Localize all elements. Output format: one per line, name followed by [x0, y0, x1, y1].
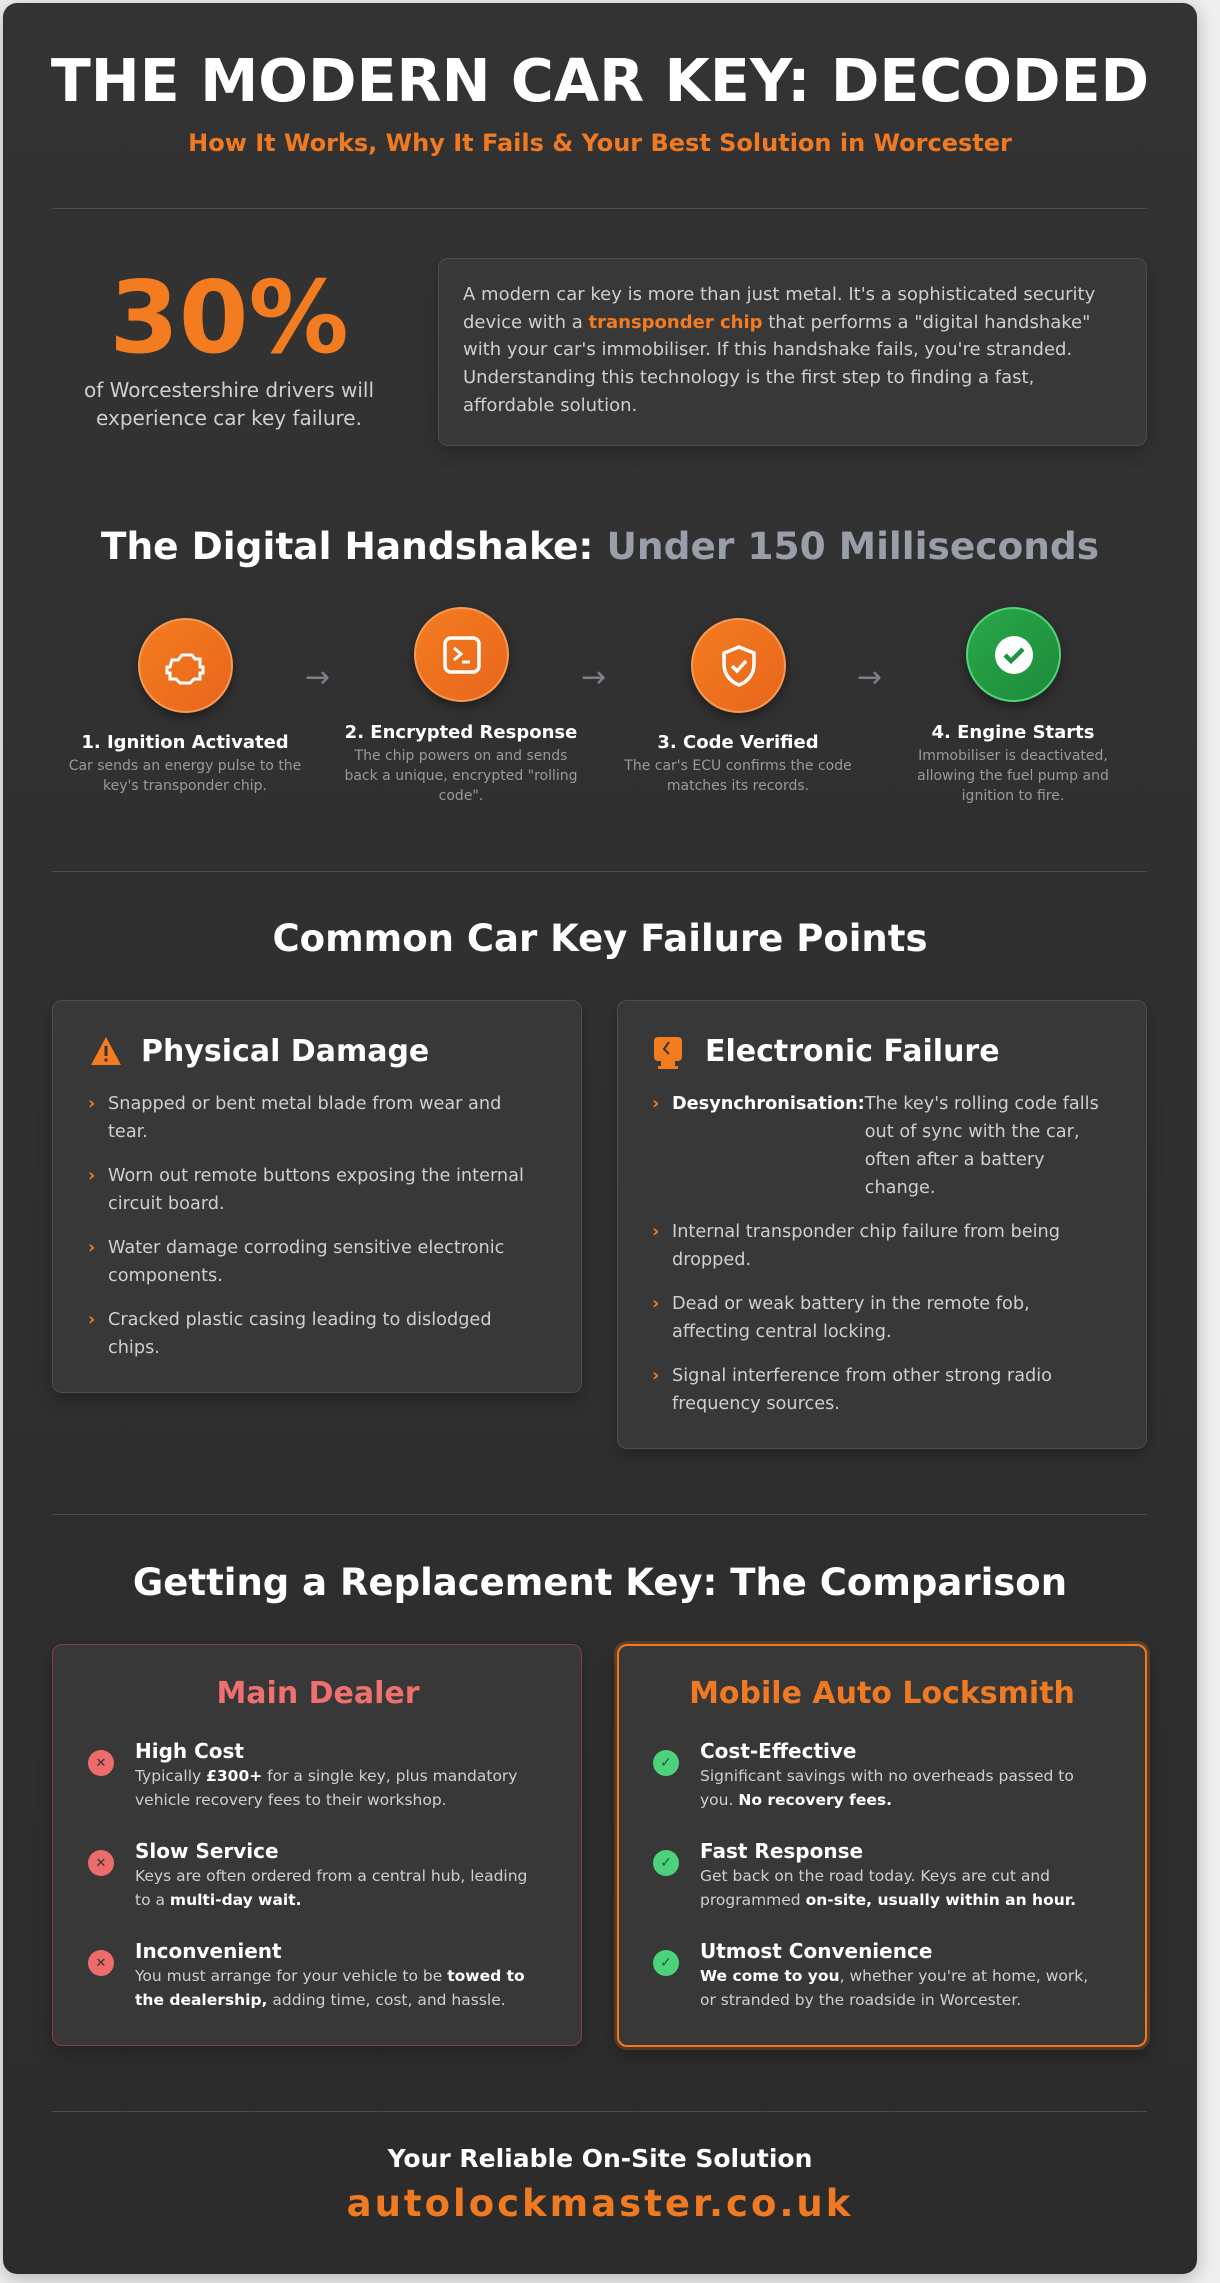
step 4 text: 4. Engine Starts [932, 722, 1094, 743]
panel: physical damage [52, 1000, 582, 1393]
heading: comparison: Getting a Replacement Key: The Comparison [133, 1561, 1067, 1604]
panel: mobile locksmith: Significant savings with no overheads passed to you. No recovery fees. [700, 1767, 1074, 1809]
item: fast response [653, 1839, 1076, 1909]
panel: mobile locksmith: Get back on the road today. Keys are cut and programmed on-site, usually within an hour. [700, 1867, 1076, 1909]
panel: physical damage: Water damage corroding sensitive electronic components. [108, 1238, 504, 1286]
step 2 icon: terminal [414, 607, 509, 702]
intro text box: A modern car key is more than just metal. It's a sophisticated security device with a transponder chip that performs a "digital handshake" with your car's immobiliser. If this handshake fails, you're stranded. Understanding this technology is the first step to finding a fast, affordable solution. [463, 284, 1095, 416]
step 3 icon: shield [691, 618, 786, 713]
list [652, 1094, 1099, 1198]
panel: electronic failure: Signal interference from other strong radio frequency sources. [672, 1366, 1052, 1414]
panel: mobile locksmith: Cost-Effective [700, 1739, 856, 1763]
panel: main dealer: Keys are often ordered from a central hub, leading to a multi-day wait. [135, 1867, 527, 1909]
panel: electronic failure: › [652, 1366, 659, 1386]
step 2 text [344, 722, 578, 804]
step 3 text: The car's ECU confirms the code matches its records. [624, 758, 852, 794]
card title: Main Dealer [216, 1676, 420, 1711]
panel: electronic failure: › [652, 1094, 659, 1114]
panel: main dealer: You must arrange for your vehicle to be towed to the dealership, adding time, cost, and hassle. [135, 1967, 525, 2009]
intro text box [438, 258, 1147, 446]
panel: main dealer: ✕ [96, 1956, 106, 1970]
footer url: autolockmaster.co.uk [347, 2182, 853, 2225]
step 3 text: 3. Code Verified [657, 732, 819, 753]
item: convenience [653, 1939, 1088, 2009]
icon: warning [91, 1037, 121, 1065]
arrow 1: → [305, 660, 330, 695]
panel: mobile locksmith [617, 1644, 1147, 2047]
panel: main dealer: Inconvenient [135, 1939, 282, 1963]
item: high cost [88, 1739, 517, 1809]
item: cost-effective [653, 1739, 1074, 1809]
item: slow service [88, 1839, 527, 1909]
step 4 icon: check [966, 607, 1061, 702]
title: THE MODERN CAR KEY: DECODED [51, 47, 1149, 115]
step 4 text [917, 722, 1109, 804]
list: Snapped or bent metal blade from wear and tear. [108, 1094, 501, 1142]
panel: physical damage: Worn out remote buttons exposing the internal circuit board. [108, 1166, 524, 1214]
panel: main dealer: ✕ [96, 1756, 106, 1770]
panel: mobile locksmith: ✓ [660, 1755, 672, 1771]
step 1 icon: engine [138, 618, 233, 713]
list: Desynchronisation: [672, 1094, 865, 1114]
step 3 text [624, 732, 852, 794]
step 4 text: Immobiliser is deactivated, allowing the fuel pump and ignition to fire. [917, 748, 1109, 804]
step 1 text: 1. Ignition Activated [81, 732, 289, 753]
step 2 text: The chip powers on and sends back a unique, encrypted "rolling code". [344, 748, 578, 804]
panel: mobile locksmith: ✓ [660, 1955, 672, 1971]
panel: electronic failure: Dead or weak battery in the remote fob, affecting central locking. [672, 1294, 1030, 1342]
stat: 30%: 30% [109, 259, 349, 376]
icon: electronic [654, 1037, 682, 1069]
panel: electronic failure: › [652, 1294, 659, 1314]
subtitle: How It Works, Why It Fails & Your Best Solution in Worcester [188, 129, 1012, 157]
panel: mobile locksmith: Fast Response [700, 1839, 863, 1863]
panel: mobile locksmith: Utmost Convenience [700, 1939, 932, 1963]
panel: physical damage: › [88, 1166, 95, 1186]
stat: 30% [84, 259, 374, 430]
card title: Mobile Auto Locksmith [689, 1676, 1075, 1711]
panel: main dealer [52, 1644, 582, 2046]
stat: 30%: of Worcestershire drivers will [84, 378, 374, 402]
panel: electronic failure [617, 1000, 1147, 1449]
footer tagline: Your Reliable On-Site Solution [388, 2144, 812, 2173]
heading: Electronic Failure [705, 1034, 1000, 1069]
panel: physical damage: Cracked plastic casing leading to dislodged chips. [108, 1310, 492, 1358]
heading: digital handshake: The Digital Handshake: Under 150 Milliseconds [101, 524, 1099, 568]
stat: 30%: experience car key failure. [96, 406, 362, 430]
item: inconvenient [88, 1939, 525, 2009]
panel: electronic failure: › [652, 1222, 659, 1242]
list: The key's rolling code falls out of sync with the car, often after a battery change. [865, 1094, 1099, 1198]
panel: main dealer: Slow Service [135, 1839, 279, 1863]
panel: mobile locksmith: ✓ [660, 1855, 672, 1871]
heading: failure points: Common Car Key Failure Points [273, 917, 927, 960]
step 1 text [69, 732, 301, 794]
heading: Physical Damage [141, 1034, 429, 1069]
arrow 2: → [581, 660, 606, 695]
panel: main dealer: ✕ [96, 1856, 106, 1870]
panel: main dealer: High Cost [135, 1739, 244, 1763]
panel: physical damage: › [88, 1310, 95, 1330]
step 1 text: Car sends an energy pulse to the key's transponder chip. [69, 758, 301, 794]
step 2 text: 2. Encrypted Response [345, 722, 577, 743]
panel: electronic failure: Internal transponder chip failure from being dropped. [672, 1222, 1060, 1270]
panel: main dealer: Typically £300+ for a single key, plus mandatory vehicle recovery fees to their workshop. [135, 1767, 517, 1809]
arrow 3: → [857, 660, 882, 695]
panel: physical damage: › [88, 1238, 95, 1258]
panel: physical damage: › [88, 1094, 95, 1114]
panel: mobile locksmith: We come to you, whether you're at home, work, or stranded by the roadside in Worcester. [700, 1967, 1088, 2009]
